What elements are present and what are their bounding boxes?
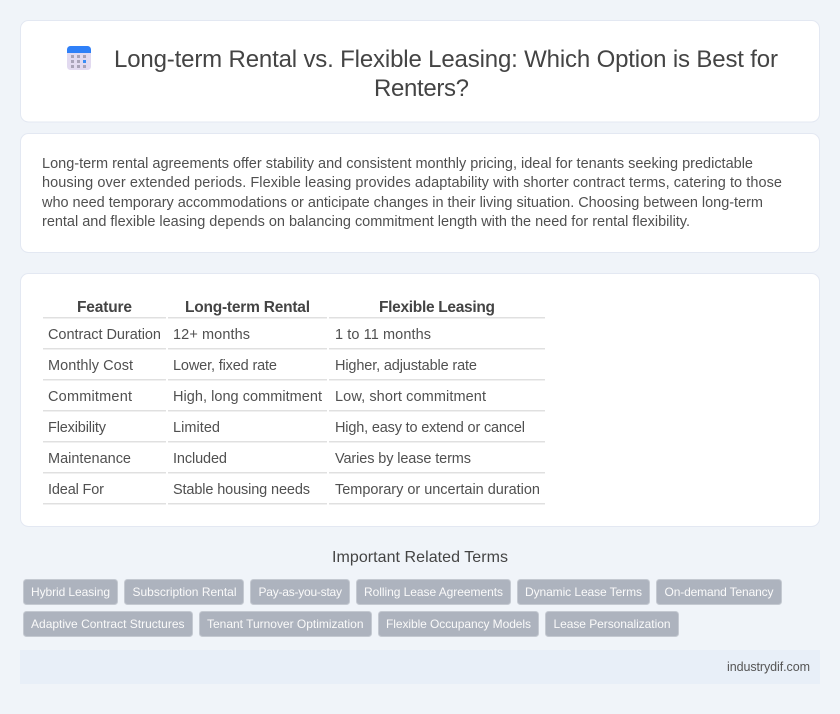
- table header: [77, 299, 495, 316]
- table header: Long-term Rental: [185, 299, 310, 316]
- table row: contract duration: Contract Duration: [48, 327, 161, 343]
- chip: rolling lease agreements: [356, 580, 510, 604]
- chip: flexible occupancy models: [378, 612, 538, 636]
- table row: contract duration: [48, 327, 431, 343]
- footer: [20, 650, 820, 684]
- title: [114, 46, 778, 102]
- chip: adaptive contract structures: [24, 612, 192, 636]
- panel: introduction text: [20, 134, 820, 252]
- table row: monthly cost: [48, 358, 477, 374]
- title: Renters?: [374, 75, 469, 102]
- chip: pay-as-you-stay: [250, 580, 350, 604]
- chip: dynamic lease terms: Dynamic Lease Terms: [525, 585, 642, 599]
- table row: maintenance: [48, 451, 471, 467]
- heading: important related terms: Important Related Terms: [332, 549, 508, 566]
- chip: tenant turnover optimization: [200, 612, 372, 636]
- chip: dynamic lease terms: [518, 580, 650, 604]
- table row: ideal for: Temporary or uncertain duration: [335, 482, 540, 498]
- chip: subscription rental: Subscription Rental: [132, 585, 236, 599]
- table row: commitment: High, long commitment: [173, 389, 322, 405]
- title: Long-term Rental vs. Flexible Leasing: Which Option is Best for: [114, 46, 778, 73]
- chip: pay-as-you-stay: Pay-as-you-stay: [258, 585, 342, 599]
- table row: ideal for: Stable housing needs: [173, 482, 310, 498]
- table row: monthly cost: Monthly Cost: [48, 358, 133, 374]
- panel: comparison table: [20, 274, 820, 526]
- table row: commitment: Commitment: [48, 389, 132, 405]
- table row: ideal for: [48, 482, 540, 498]
- table row: ideal for: Ideal For: [48, 482, 104, 498]
- panel: title card: [20, 20, 820, 122]
- table row: maintenance: Varies by lease terms: [335, 451, 471, 467]
- icon: calendar: [67, 46, 91, 70]
- chip: on-demand tenancy: On-demand Tenancy: [664, 585, 774, 599]
- table row: monthly cost: Higher, adjustable rate: [335, 358, 477, 374]
- table row: flexibility: High, easy to extend or cancel: [335, 420, 525, 436]
- table row: maintenance: Maintenance: [48, 451, 131, 467]
- table row: flexibility: Flexibility: [48, 420, 107, 436]
- table row: contract duration: 1 to 11 months: [335, 327, 431, 343]
- footer source: industrydif.com: [727, 660, 810, 674]
- text block: introduction: housing over extended periods. Flexible leasing provides adaptability with shorter contract terms, catering to those: [42, 175, 782, 191]
- text block: introduction: [41, 156, 782, 230]
- chip: flexible occupancy models: Flexible Occupancy Models: [386, 617, 531, 631]
- table row: commitment: [48, 389, 486, 405]
- panel: related term chips: [24, 580, 782, 636]
- chip: on-demand tenancy: [656, 580, 782, 604]
- table row: maintenance: Included: [173, 451, 227, 467]
- text block: introduction: Long-term rental agreements offer stability and consistent monthly pricing, ideal for tenants seeking predictable: [42, 156, 753, 172]
- chip: tenant turnover optimization: Tenant Turnover Optimization: [207, 617, 364, 631]
- table row: contract duration: 12+ months: [173, 327, 250, 343]
- chip: hybrid leasing: Hybrid Leasing: [31, 585, 110, 599]
- chip: adaptive contract structures: Adaptive Contract Structures: [31, 617, 184, 631]
- table row: commitment: Low, short commitment: [335, 389, 486, 405]
- text block: introduction: rental and flexible leasing depends on balancing commitment length with the need for rental flexibility.: [42, 214, 690, 230]
- table row: monthly cost: Lower, fixed rate: [173, 358, 277, 374]
- chip: lease personalization: [546, 612, 678, 636]
- table row: flexibility: Limited: [173, 420, 220, 436]
- table row: flexibility: [48, 420, 525, 436]
- table header: Flexible Leasing: [379, 299, 495, 316]
- chip: lease personalization: Lease Personalization: [554, 617, 670, 631]
- chip: subscription rental: [124, 580, 244, 604]
- chip: hybrid leasing: [24, 580, 118, 604]
- table header: Feature: [77, 299, 132, 316]
- chip: rolling lease agreements: Rolling Lease Agreements: [364, 585, 503, 599]
- text block: introduction: who need temporary accommodations or anticipate changes in their living situation. Choosing between long-term: [41, 195, 763, 211]
